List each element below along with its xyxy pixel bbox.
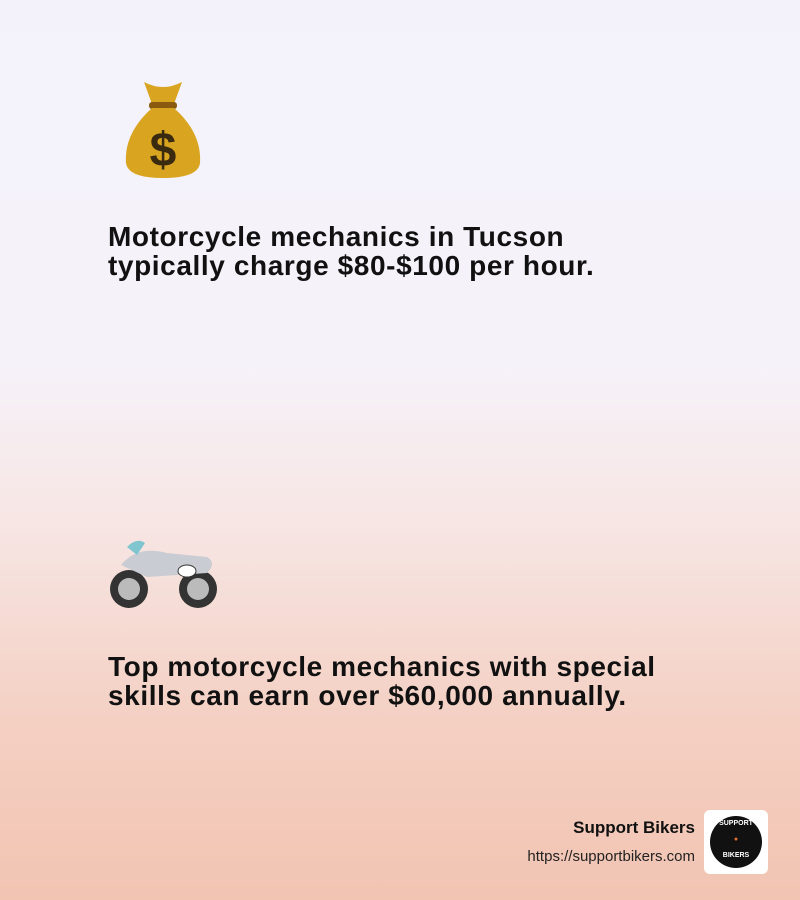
text block: annual earnings: skills can earn over $60,000 annually. xyxy=(108,680,627,711)
text block: annual earnings xyxy=(108,651,656,711)
icon: money bag xyxy=(126,82,200,178)
text block: hourly rate xyxy=(108,221,594,281)
icon: motorcycle xyxy=(110,540,217,608)
logo: BIKERS xyxy=(723,852,749,859)
text block: hourly rate: Motorcycle mechanics in Tucson xyxy=(108,221,564,252)
footer: brand xyxy=(527,810,768,874)
icon: money bag: $ xyxy=(150,124,177,177)
brand url: https://supportbikers.com xyxy=(527,848,695,865)
logo: SUPPORT xyxy=(719,820,753,827)
logo xyxy=(704,810,768,874)
text block: hourly rate: typically charge $80-$100 per hour. xyxy=(108,250,594,281)
brand name: Support Bikers xyxy=(573,818,695,837)
text block: annual earnings: Top motorcycle mechanics with special xyxy=(108,651,656,682)
logo: ● xyxy=(734,836,738,843)
